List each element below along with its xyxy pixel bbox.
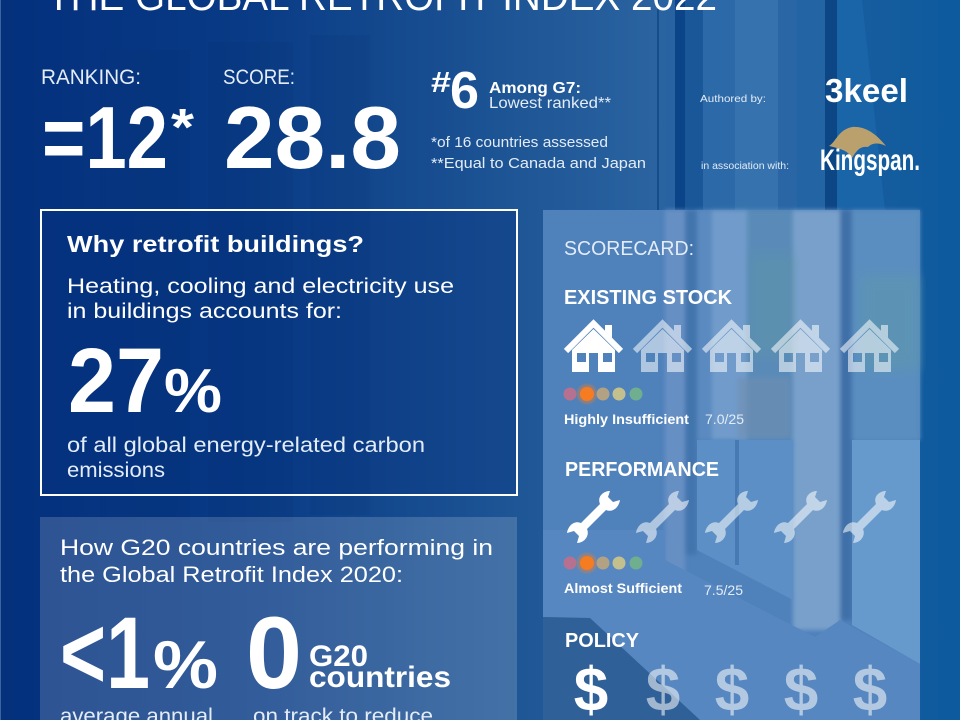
ranking block: =12: [42, 88, 168, 187]
G7 rank: #: [431, 67, 451, 99]
heading: why retrofit: Why retrofit buildings?: [67, 231, 364, 257]
section: performance: [564, 459, 896, 598]
stat: 27 percent: [68, 330, 222, 432]
rating text: 7.5/25: [704, 583, 743, 598]
icons: wrenches: [567, 491, 896, 543]
text: intro: in buildings accounts for:: [67, 299, 342, 323]
G7 rank: Lowest ranked**: [489, 95, 611, 112]
panel: scorecard: [543, 210, 920, 720]
stat: under 1 percent: <1: [60, 596, 150, 710]
icons: houses: [566, 324, 897, 372]
footnotes: *of 16 countries assessed: [431, 134, 608, 151]
window scene: [543, 210, 920, 720]
credit: authored by: 3keel: [825, 72, 908, 109]
label: existing stock: EXISTING STOCK: [564, 287, 733, 309]
ranking block: RANKING:: [41, 66, 141, 89]
heading: G20: How G20 countries are performing in: [60, 535, 493, 560]
credit: authored by: [700, 72, 908, 109]
text: emissions: of all global energy-related carbon: [67, 433, 425, 457]
stat: 0 G20 countries: [246, 596, 451, 720]
rating text: Almost Sufficient: [564, 581, 683, 596]
label: policy: POLICY: [565, 630, 640, 652]
rating text: [564, 581, 743, 598]
score block: SCORE:: [223, 66, 295, 89]
heading: scorecard: SCORECARD:: [564, 238, 694, 260]
text: intro: [67, 274, 454, 323]
label: performance: PERFORMANCE: [565, 459, 719, 481]
heading: G20: [60, 535, 493, 587]
text: emissions: emissions: [67, 458, 165, 482]
stat: 0 G20 countries: 0: [246, 596, 302, 710]
rating dots: [564, 384, 642, 404]
stat: under 1 percent: %: [153, 627, 218, 703]
credit: in association with: [701, 127, 920, 177]
stat: under 1 percent: [60, 596, 218, 720]
credit: in association with: in association with:: [701, 161, 789, 172]
G7 rank: [431, 62, 611, 120]
text: intro: Heating, cooling and electricity use: [67, 274, 454, 298]
rating text: Highly Insufficient: [564, 412, 690, 427]
heading: G20: the Global Retrofit Index 2020:: [60, 562, 403, 587]
ranking block: *: [171, 99, 195, 157]
G7 rank: 6: [450, 62, 479, 120]
rating text: 7.0/25: [705, 412, 744, 427]
stat: 27 percent: %: [164, 357, 222, 426]
section: existing stock: [564, 287, 897, 427]
stat: 0 G20 countries: countries: [309, 661, 451, 694]
credit: authored by: Authored by:: [700, 94, 766, 105]
icons: dollars: [574, 656, 887, 720]
panel: G20 performance: [40, 517, 517, 720]
footnotes: [431, 134, 646, 172]
score block: 28.8: [224, 88, 401, 187]
G7 rank: Among G7:: [489, 80, 581, 97]
rating dots: [564, 553, 642, 573]
footnotes: **Equal to Canada and Japan: [431, 155, 646, 172]
text: emissions: [67, 433, 425, 482]
stat: 0 G20 countries: G20: [309, 640, 368, 673]
section: policy: [565, 630, 887, 720]
panel: why retrofit: [41, 210, 517, 495]
rating text: [564, 412, 744, 427]
stat: 27 percent: 27: [68, 330, 164, 432]
